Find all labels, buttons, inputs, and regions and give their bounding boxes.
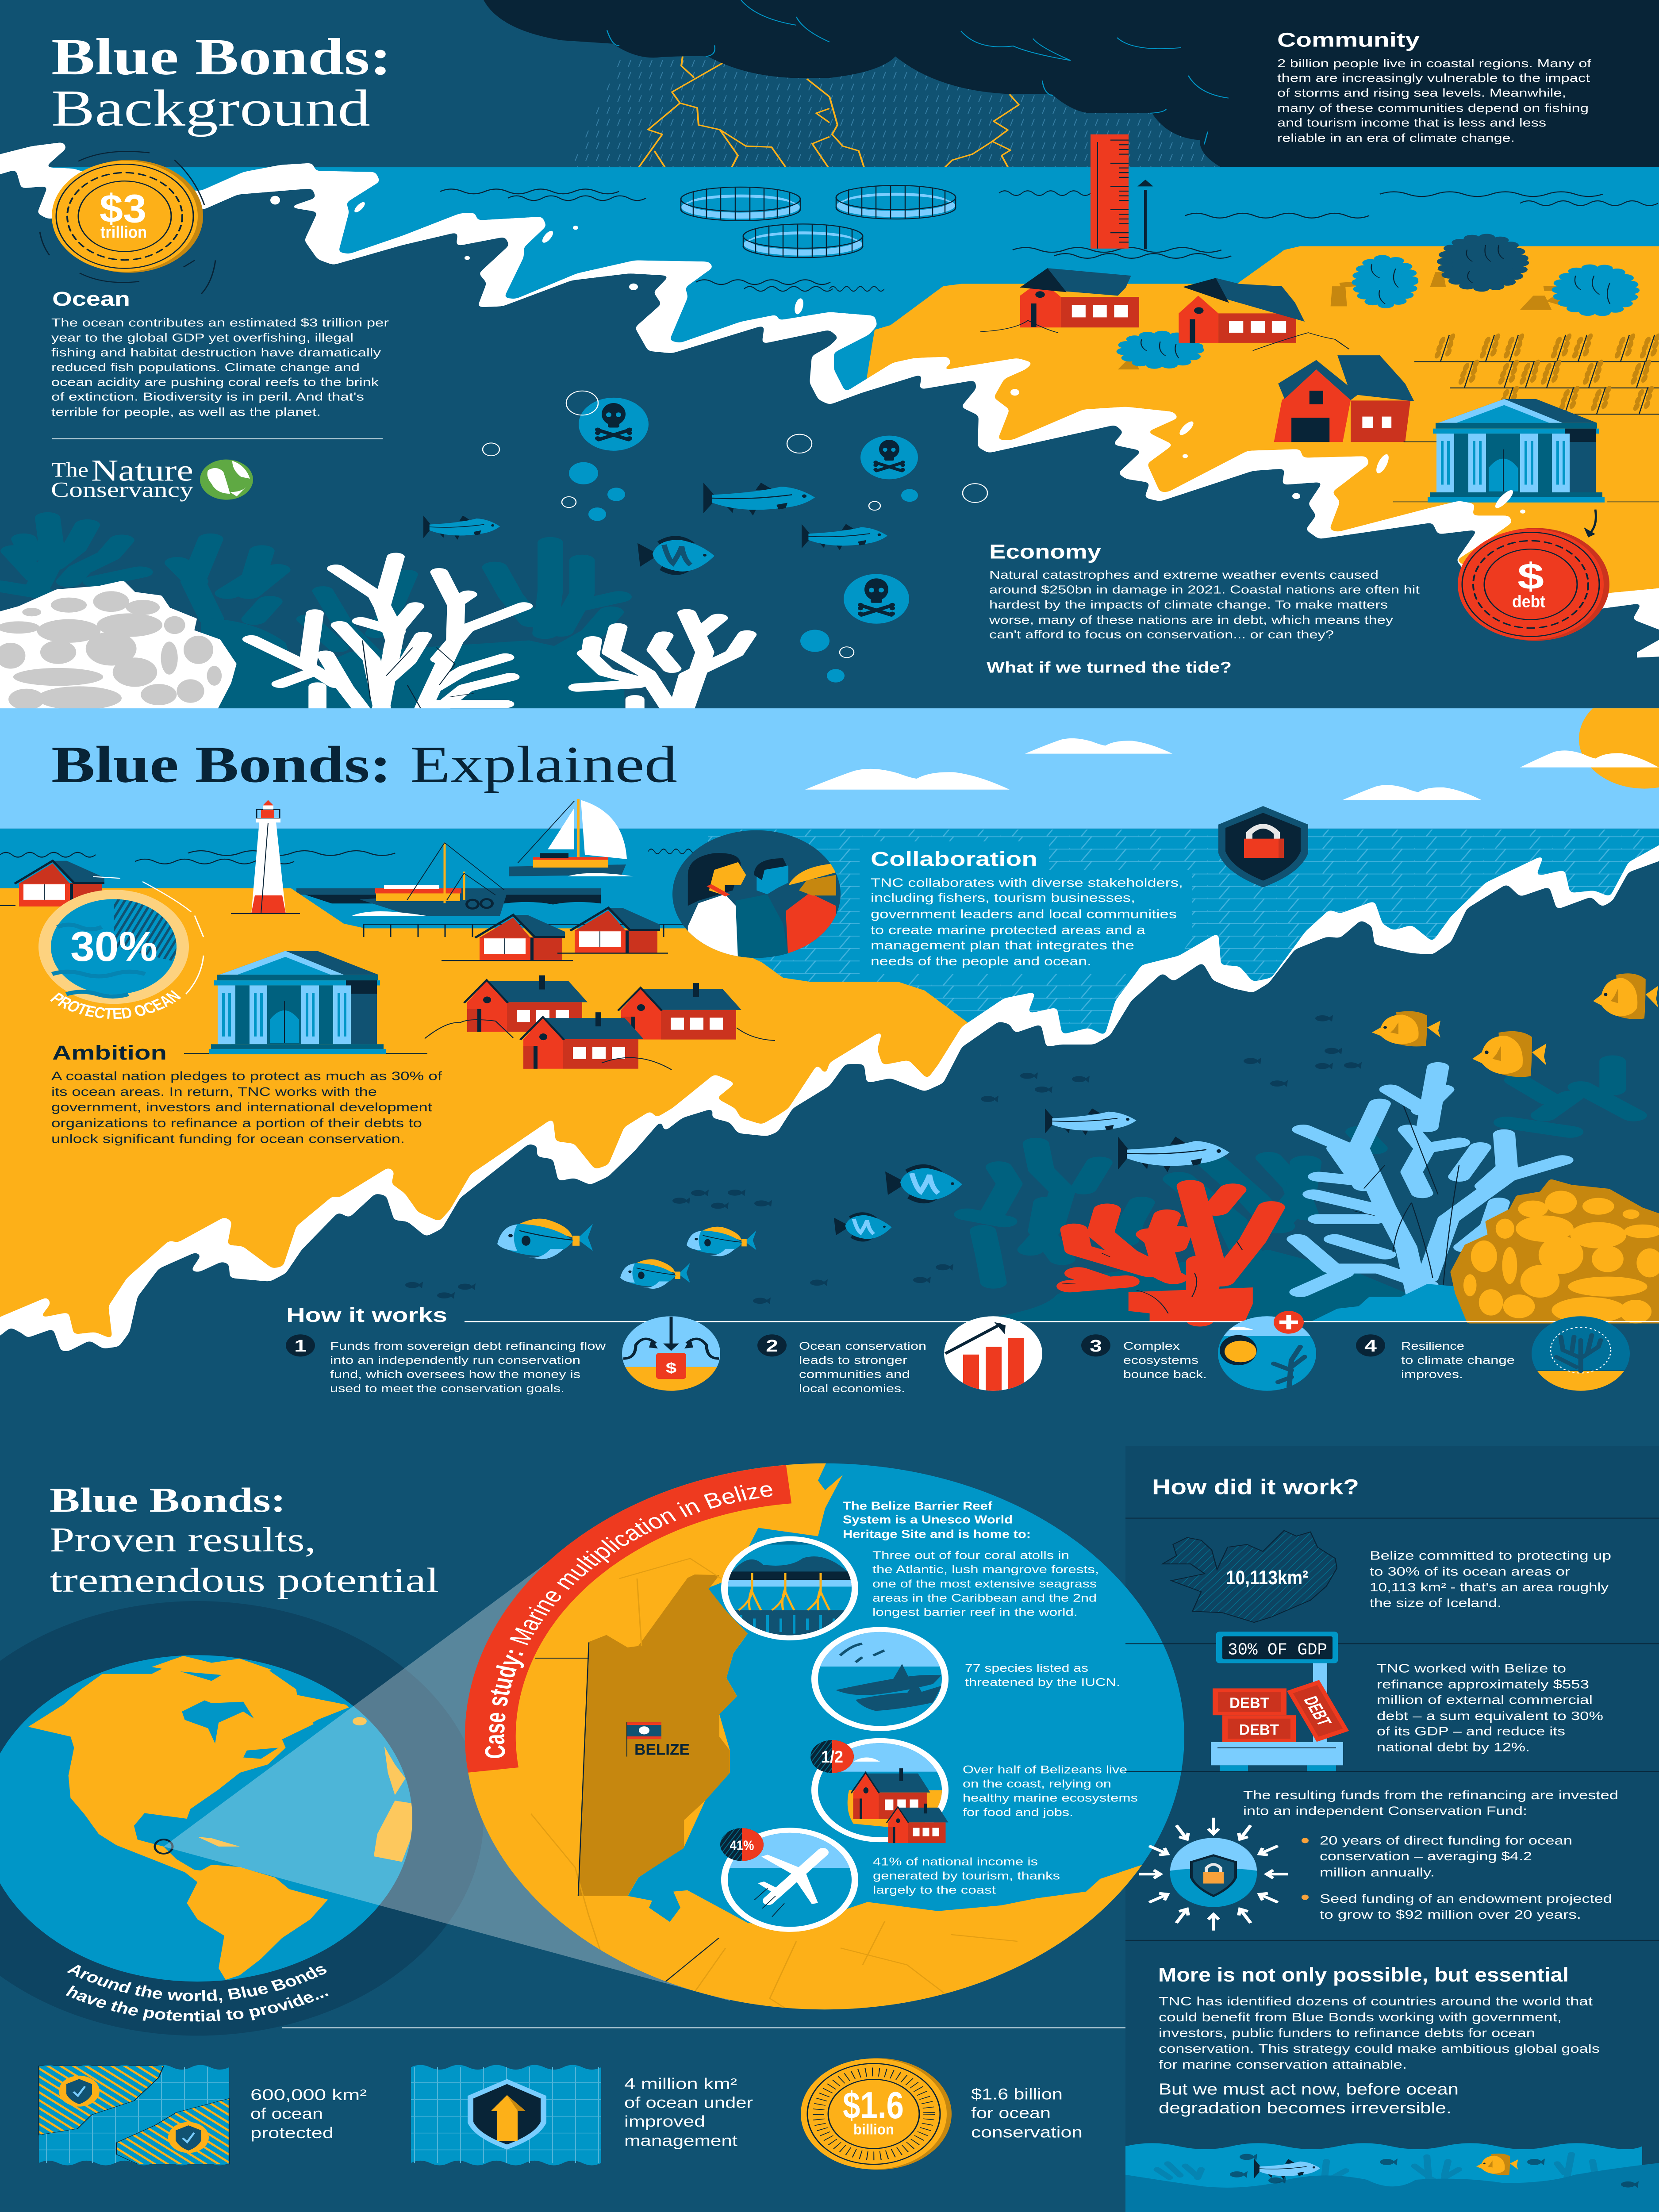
trees: [1118, 237, 1632, 369]
Belize text column: Over half of Belizeans live: [963, 1763, 1127, 1776]
step 2: [757, 1316, 1042, 1395]
pier: [363, 924, 686, 937]
Iceland map: [1163, 1531, 1337, 1622]
text: conservation fund: into an independent Conservation Fund:: [1243, 1804, 1527, 1818]
wave lines on sea: [440, 189, 1658, 291]
text: Economy: worse, many of these nations are in debt, which means they: [989, 614, 1394, 626]
globe: [0, 1646, 420, 1988]
Belize text column: System is a Unesco World: [843, 1513, 1013, 1526]
lighthouse: [231, 800, 300, 914]
bleached branch coral large: [251, 557, 524, 708]
text: Community: [1277, 29, 1592, 144]
text: Iceland comparison: [1370, 1549, 1611, 1610]
stat: ocean protected: 600,000 km²: [250, 2086, 367, 2104]
text: conservation fund: million annually.: [1320, 1866, 1435, 1879]
case study banner: Case study: Marine multiplication in Belize: [479, 1477, 776, 1759]
text: conservation fund: Seed funding of an endowment projected: [1320, 1892, 1612, 1905]
text: Ocean: ocean acidity are pushing coral reefs to the brink: [51, 376, 379, 388]
step 3: ecosystems: [1123, 1354, 1198, 1367]
stat: ocean protected: of ocean: [250, 2105, 323, 2122]
Belize text column: for food and jobs.: [963, 1806, 1073, 1819]
title: Background: Blue Bonds:: [51, 28, 392, 85]
fish (explained): [497, 973, 1658, 1289]
bank (ambition): [184, 951, 427, 1054]
text: Ambition: unlock significant funding for ocean conservation.: [51, 1132, 405, 1145]
stat: ocean protected: [39, 2065, 367, 2165]
text: Ocean: fishing and habitat destruction have dramatically: [51, 346, 381, 359]
land: [0, 888, 1000, 1394]
icon: 30% protected ocean: [38, 876, 204, 1022]
dock: [296, 888, 601, 904]
step 2: 2: [766, 1337, 778, 1356]
step 3: Complex: [1123, 1340, 1180, 1352]
mangrove circle: [721, 1536, 858, 1640]
title: Proven results: tremendous potential: [50, 1561, 439, 1599]
damaged houses: [980, 268, 1349, 350]
debt scale: DEBT: [1239, 1722, 1279, 1738]
step 1: 1: [294, 1337, 307, 1356]
dolphins circle: [811, 1627, 949, 1731]
text: Economy: What if we turned the tide?: [987, 659, 1232, 676]
bubbles: [483, 391, 987, 683]
stat: ocean under improved management: [411, 2065, 753, 2165]
text: Community: many of these communities depend on fishing: [1277, 102, 1589, 115]
Belize land: [578, 1575, 748, 1896]
wave lines: [0, 849, 698, 864]
bleached branch coral small: [578, 613, 747, 708]
text: refinancing: of its GDP – and reduce its: [1377, 1724, 1565, 1738]
plane circle with 41% badge: [720, 1828, 858, 1932]
step 1: into an independently run conservation: [330, 1354, 580, 1367]
housing circle with 1/2 badge: [810, 1738, 949, 1843]
fish (background): [423, 483, 887, 575]
text: Ambition: its ocean areas. In return, TNC works with the: [51, 1085, 377, 1098]
text: Community: 2 billion people live in coastal regions. Many of: [1277, 58, 1592, 70]
text: Iceland comparison: Belize committed to protecting up: [1370, 1549, 1611, 1563]
foam droplets: [270, 196, 1659, 657]
bank (economy): [1428, 399, 1605, 503]
step 4: [1356, 1313, 1634, 1394]
text: Collaboration: including fishers, tourism businesses,: [871, 891, 1135, 904]
stat: ocean protected: protected: [250, 2124, 334, 2142]
sea level ruler and arrow: [1091, 134, 1153, 249]
stat: $1.6 billion: billion: [853, 2122, 894, 2138]
title: Explained: Explained: [410, 735, 677, 793]
step 1: [286, 1313, 724, 1395]
curved text: around the world: [62, 1960, 332, 2025]
text: refinancing: TNC worked with Belize to: [1377, 1662, 1566, 1675]
text: Ocean: terrible for people, as well as the planet.: [51, 406, 321, 419]
icon: $3 trillion coin: $3: [100, 187, 146, 231]
Belize text column: longest barrier reef in the world.: [872, 1606, 1078, 1618]
text: conservation fund: 20 years of direct funding for ocean: [1320, 1834, 1572, 1847]
wheat field: [1414, 333, 1659, 414]
icon: shield with lock: [1218, 806, 1308, 887]
lightning bolts: [639, 57, 1019, 167]
Belize text column: healthy marine ecosystems: [963, 1792, 1138, 1804]
step 2: communities and: [799, 1368, 910, 1381]
section: proven results panel: [1125, 1446, 1659, 2212]
text: More is not only possible: degradation becomes irreversible.: [1159, 2099, 1452, 2116]
text: conservation fund: to grow to $92 million over 20 years.: [1320, 1908, 1581, 1921]
debt scale: DEBT: [1229, 1695, 1269, 1711]
rain: [568, 57, 1221, 167]
title: Background: [51, 28, 392, 137]
barn house: [1274, 355, 1659, 502]
text: Iceland comparison: 10,113 km² - that's an area roughly: [1370, 1580, 1609, 1594]
wave foam and deep water: [0, 833, 1659, 1478]
land: [830, 246, 1659, 668]
text: Economy: [987, 541, 1420, 676]
text: More is not only possible: TNC has identified dozens of countries around the world that: [1159, 1994, 1593, 2008]
text: More is not only possible: for marine conservation attainable.: [1159, 2058, 1407, 2071]
stat: ocean under improved management: improved: [624, 2113, 705, 2130]
icon: $3 trillion coin: [40, 151, 215, 294]
text: More is not only possible: But we must act now, before ocean: [1159, 2080, 1459, 2098]
Belize text column: Three out of four coral atolls in: [872, 1549, 1069, 1562]
text: Collaboration: needs of the people and ocean.: [871, 954, 1091, 968]
text: Collaboration: [871, 848, 1183, 968]
text: Ocean: of extinction. Biodiversity is in peril. And that's: [51, 391, 364, 403]
logo: The Nature Conservancy: Conservancy: [51, 478, 194, 502]
right panel heading: How did it work?: [1125, 1475, 1659, 1940]
Iceland map: 10,113km²: [1226, 1567, 1308, 1588]
title: Background: Background: [51, 79, 370, 137]
text: More is not only possible: More is not only possible, but essential: [1158, 1964, 1569, 1986]
Belize text column: one of the most extensive seagrass: [872, 1578, 1097, 1590]
Belize text column: 77 species listed as: [965, 1662, 1088, 1674]
step 4: Resilience: [1401, 1340, 1464, 1352]
text: Economy: hardest by the impacts of climate change. To make matters: [989, 599, 1388, 611]
step 2: leads to stronger: [799, 1354, 907, 1367]
text: Iceland comparison: to 30% of its ocean areas or: [1370, 1565, 1570, 1578]
step 1: fund, which oversees how the money is: [330, 1368, 580, 1381]
right panel heading: How did it work?: How did it work?: [1152, 1475, 1359, 1499]
heading: How it works: How it works: [286, 1304, 447, 1326]
sun: [1579, 708, 1659, 789]
Belize map circle: [465, 1463, 1184, 2009]
text: conservation fund: The resulting funds from the refinancing are invested: [1243, 1788, 1618, 1802]
text: Economy: Natural catastrophes and extreme weather events caused: [989, 569, 1379, 581]
text: refinancing: million of external commercial: [1377, 1693, 1593, 1706]
text: Community: reliable in an era of climate change.: [1277, 132, 1515, 144]
text: Ambition: organizations to refinance a portion of their debts to: [51, 1116, 422, 1130]
houses cluster: [425, 975, 775, 1070]
sea with protected grid: [0, 829, 1659, 1165]
text: Community: Community: [1277, 29, 1420, 51]
Belize text column: areas in the Caribbean and the 2nd: [872, 1592, 1097, 1605]
text: More is not only possible: investors, public funders to refinance debts for ocean: [1159, 2026, 1535, 2039]
icon: debt coin: $: [1517, 556, 1544, 597]
small fish: [405, 1015, 1362, 1304]
text: Ambition: [51, 1042, 442, 1145]
text: Collaboration: management plan that integrates the: [871, 938, 1134, 952]
text: refinancing: [1377, 1662, 1603, 1754]
text: Ocean: [51, 288, 389, 439]
Belize text column: the Atlantic, lush mangrove forests,: [872, 1563, 1099, 1576]
text: Economy: Economy: [989, 541, 1101, 563]
logo: The Nature Conservancy: The: [51, 458, 88, 481]
Belize text column: generated by tourism, thanks: [873, 1870, 1060, 1882]
divider: [282, 2027, 1125, 2028]
map roads and borders: [531, 1559, 1018, 2015]
Belize text column: Heritage Site and is home to:: [843, 1528, 1031, 1540]
text: Ambition: A coastal nation pledges to protect as much as 30% of: [51, 1069, 442, 1083]
globe halo: [0, 1601, 484, 2035]
text: Collaboration: TNC collaborates with diverse stakeholders,: [871, 876, 1183, 889]
golden brain coral: [1454, 1181, 1659, 1324]
section: explained sky: [0, 708, 1659, 829]
text: Collaboration: Collaboration: [871, 848, 1037, 870]
logo: The Nature Conservancy: Nature: [91, 454, 193, 488]
section: background sky and sea: [568, 57, 1221, 167]
curved text: around the world: have the potential to provide...: [62, 1982, 332, 2025]
text: Community: and tourism income that is less and less: [1277, 117, 1546, 129]
text: Ocean: year to the global GDP yet overfishing, illegal: [51, 332, 353, 344]
stat: ocean under improved management: 4 million km²: [624, 2075, 737, 2093]
houses row: [0, 861, 668, 960]
bleached brain coral: [0, 583, 233, 710]
Belize flag and label: [627, 1722, 690, 1758]
housing circle with 1/2 badge: 1/2: [821, 1748, 843, 1767]
text: refinancing: refinance approximately $553: [1377, 1678, 1589, 1691]
arrow: bank to debt: [1584, 510, 1596, 538]
Belize text column: 41% of national income is: [873, 1855, 1038, 1868]
corals background: [956, 1061, 1634, 1321]
text: Collaboration: government leaders and local communities: [871, 907, 1177, 921]
people circle: [672, 830, 841, 958]
regional land: [442, 1444, 1194, 2049]
step 4: 4: [1364, 1337, 1377, 1356]
icon: $3 trillion coin: trillion: [100, 223, 147, 242]
text: Ambition: Ambition: [52, 1042, 167, 1064]
text: Collaboration: to create marine protected areas and a: [871, 923, 1145, 937]
storm cloud: [484, 0, 1659, 167]
step 3: 3: [1090, 1337, 1102, 1356]
background corals: [0, 518, 624, 708]
step 3: bounce back.: [1123, 1368, 1207, 1381]
step 4: to climate change: [1401, 1354, 1515, 1367]
red coral: [1062, 1186, 1271, 1321]
sailboat: [509, 799, 634, 876]
clouds: [805, 738, 1659, 800]
step 2: local economies.: [799, 1382, 905, 1395]
fish farm pens: [681, 185, 956, 257]
Belize flag and label: BELIZE: [634, 1741, 690, 1758]
text: Economy: can't afford to focus on conservation... or can they?: [989, 629, 1334, 641]
zoom beam: [164, 1550, 825, 2001]
title: Proven results: Blue Bonds:: [50, 1481, 286, 1519]
icon: debt coin: [1458, 528, 1609, 641]
sea: [0, 167, 1659, 503]
stat: ocean under improved management: management: [624, 2132, 738, 2149]
stat: $1.6 billion: for ocean: [971, 2104, 1051, 2122]
title: Explained: Blue Bonds:: [51, 735, 392, 793]
stat: $1.6 billion: $1.6: [843, 2085, 904, 2127]
text: More is not only possible: [1158, 1964, 1600, 2116]
step 1: $: [666, 1360, 677, 1376]
text: Economy: around $250bn in damage in 2021. Coastal nations are often hit: [989, 584, 1420, 596]
stat: $1.6 billion: [801, 2058, 1083, 2170]
text: Community: of storms and rising sea levels. Meanwhile,: [1277, 87, 1566, 100]
stat: $1.6 billion: $1.6 billion: [971, 2085, 1063, 2103]
text: Ocean: Ocean: [52, 288, 130, 310]
wave foam and deep water: [0, 142, 1659, 726]
Belize text column: The Belize Barrier Reef: [843, 1500, 993, 1513]
text: More is not only possible: conservation. This strategy could make ambitious global goals: [1159, 2042, 1600, 2055]
text: Iceland comparison: the size of Iceland.: [1370, 1596, 1502, 1610]
debt scale: 30% OF GDP: [1228, 1641, 1327, 1660]
text: Ocean: The ocean contributes an estimated $3 trillion per: [51, 317, 389, 329]
text: refinancing: national debt by 12%.: [1377, 1740, 1530, 1754]
Belize text column: on the coast, relying on: [963, 1778, 1111, 1790]
text: Community: them are increasingly vulnerable to the impact: [1277, 72, 1590, 84]
step 1: Funds from sovereign debt refinancing flow: [330, 1340, 606, 1352]
step 2: Ocean conservation: [799, 1340, 926, 1352]
text: conservation fund: conservation – averaging $4.2: [1320, 1849, 1532, 1863]
icon: 30% protected ocean: 30%: [70, 923, 157, 970]
title: Proven results: Proven results,: [50, 1521, 316, 1559]
icon: conservation fund lock: [1139, 1818, 1288, 1931]
Belize text column: threatened by the IUCN.: [965, 1676, 1120, 1689]
skull bubbles: [579, 398, 918, 624]
heading: How it works: [286, 1304, 1659, 1326]
logo: The Nature Conservancy: [51, 454, 253, 502]
fishing boat: [352, 843, 508, 916]
text: conservation fund: [1243, 1788, 1618, 1921]
Belize text column: largely to the coast: [873, 1884, 996, 1896]
curved text: around the world: Around the world, Blue Bonds: [64, 1960, 331, 2005]
stat: ocean under improved management: of ocean under: [624, 2094, 753, 2111]
title: Proven results: [50, 1481, 439, 1599]
text: More is not only possible: could benefit from Blue Bonds working with government,: [1159, 2010, 1562, 2024]
debt scale: DEBT: [1299, 1694, 1335, 1728]
step 1: used to meet the conservation goals.: [330, 1382, 565, 1395]
text: refinancing: debt – a sum equivalent to 30%: [1377, 1709, 1603, 1723]
plane circle with 41% badge: 41%: [730, 1838, 754, 1853]
debt scale: [1211, 1632, 1349, 1771]
seabed scene: [1125, 2143, 1659, 2212]
text: Ocean: reduced fish populations. Climate change and: [51, 361, 360, 374]
title: Explained: [51, 735, 677, 793]
step 4: improves.: [1401, 1368, 1463, 1381]
locator ring on globe: [155, 1839, 173, 1854]
step 3: [1081, 1311, 1320, 1394]
icon: debt coin: debt: [1512, 592, 1545, 611]
icon: 30% protected ocean: PROTECTED OCEAN: [46, 987, 185, 1022]
text: Ambition: government, investors and international development: [51, 1100, 432, 1114]
blue coral: [1298, 1067, 1562, 1321]
stat: $1.6 billion: conservation: [971, 2124, 1083, 2141]
Belize text column: [843, 1500, 1138, 1896]
